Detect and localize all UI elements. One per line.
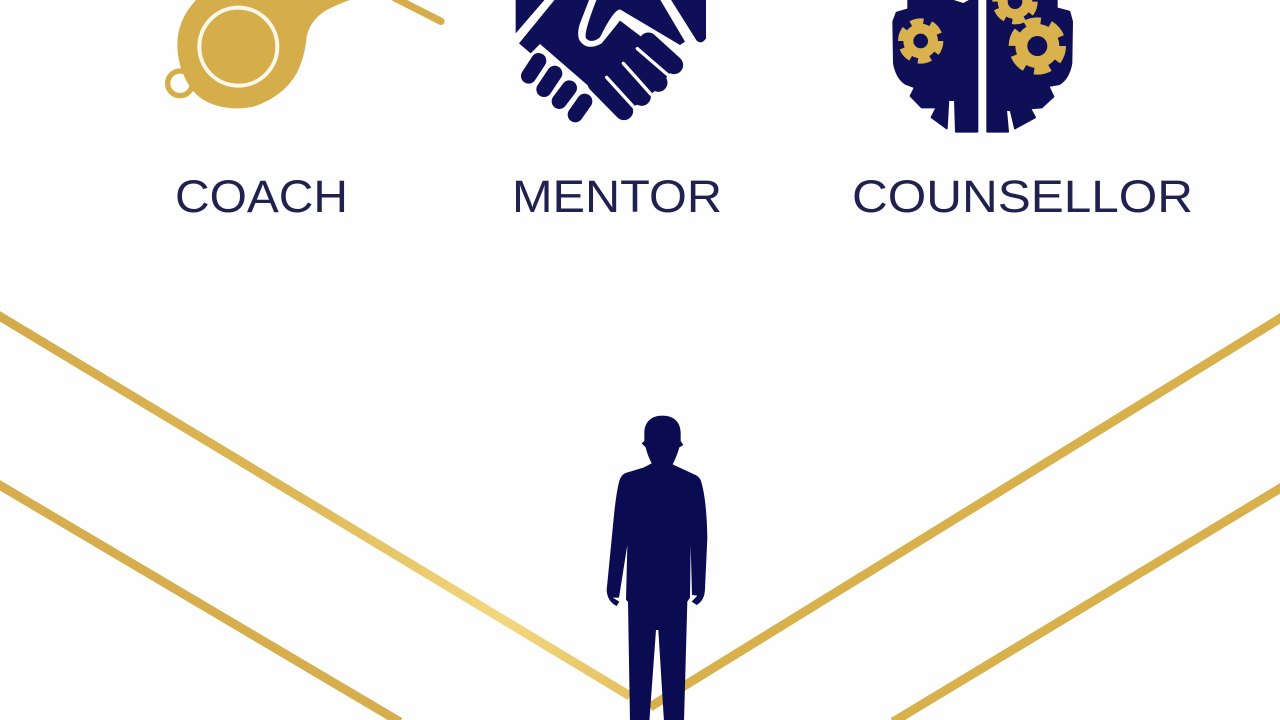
icon: whistle (168, 0, 441, 108)
gear: left (902, 22, 939, 60)
diverging gold paths (0, 314, 1280, 720)
icon: handshake (516, 0, 706, 115)
icon: brain with gears (893, 0, 1072, 132)
label: coach: COACH (175, 171, 348, 222)
label: counsellor: COUNSELLOR (852, 171, 1193, 222)
gear: top right (996, 0, 1034, 20)
figure: standing person silhouette (607, 416, 707, 720)
label: mentor: MENTOR (512, 171, 722, 222)
gear: large right (1013, 22, 1061, 70)
